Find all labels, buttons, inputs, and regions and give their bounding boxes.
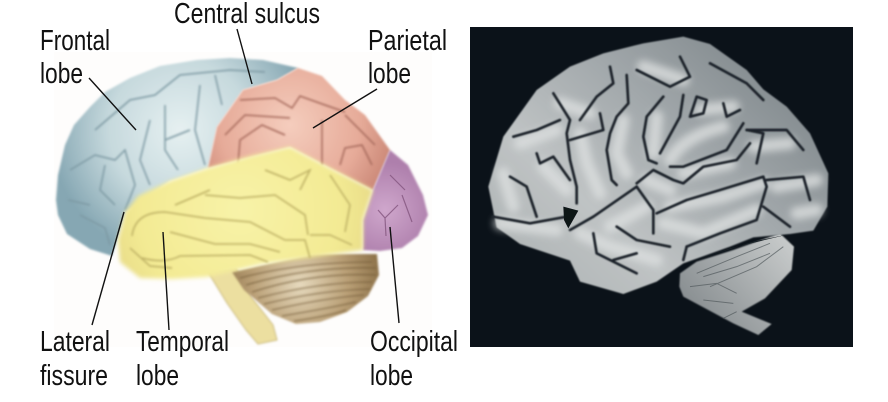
label: occipital lobe: lobe — [370, 360, 413, 392]
photo panel: real brain — [470, 27, 853, 347]
occipital lobe — [363, 150, 428, 251]
cerebellum — [232, 254, 379, 324]
leader line: central sulcus — [237, 29, 252, 84]
photo: gap between cerebrum and cerebellum — [683, 234, 790, 265]
photo: cerebellum and brain stem — [679, 233, 794, 335]
label: lateral fissure — [40, 326, 110, 392]
leader line: parietal lobe — [313, 89, 377, 128]
label: parietal lobe: lobe — [368, 58, 411, 90]
label: frontal lobe: Frontal — [40, 25, 110, 57]
photo: sulci — [493, 57, 810, 273]
frontal lobe — [56, 58, 298, 256]
parietal lobe — [208, 68, 390, 190]
leader line: occipital lobe — [390, 227, 399, 323]
leader line: frontal lobe — [89, 78, 136, 130]
photo: lateral fissure shadow — [563, 207, 578, 228]
illustration: labelled brain — [54, 29, 432, 347]
leader line: temporal lobe — [163, 232, 169, 330]
label: lateral fissure: Lateral — [40, 326, 110, 358]
label: temporal lobe: Temporal — [136, 326, 229, 358]
label: occipital lobe: Occipital — [370, 326, 458, 358]
label: frontal lobe — [40, 25, 110, 90]
label: lateral fissure: fissure — [40, 360, 108, 392]
temporal lobe — [118, 147, 373, 279]
brain stem — [208, 268, 277, 344]
leader line: lateral fissure — [92, 212, 124, 325]
label: frontal lobe: lobe — [40, 58, 83, 90]
label: occipital lobe — [370, 326, 458, 392]
photo: cerebrum — [488, 37, 828, 294]
label: parietal lobe — [368, 25, 447, 90]
label: temporal lobe: lobe — [136, 360, 179, 392]
label: parietal lobe: Parietal — [368, 25, 447, 57]
label: temporal lobe — [136, 326, 229, 392]
photo: bright gyri — [500, 67, 817, 260]
